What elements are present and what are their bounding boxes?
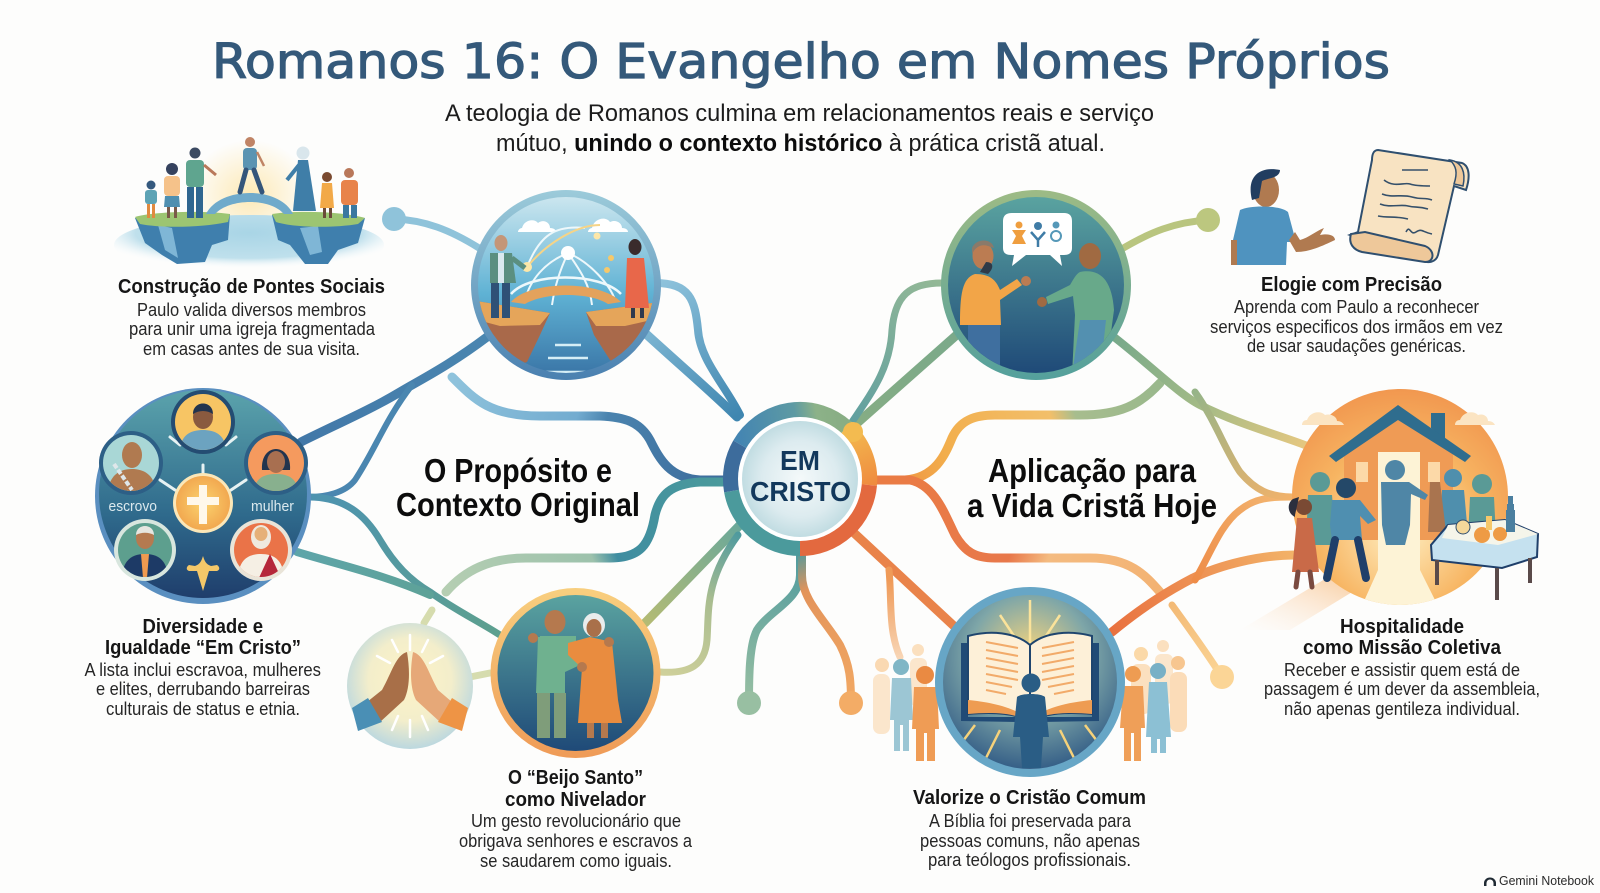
- heading: O Propósito e Contexto Original: Contexto Original: [396, 486, 640, 523]
- text: Diversidade e Igualdade: culturais de status e etnia.: [106, 699, 300, 719]
- heading: Aplicação para a Vida Cristã Hoje: [967, 452, 1217, 524]
- sub: left person with chain: [99, 431, 163, 495]
- text: Hospitalidade como Missão Coletiva: Receber e assistir quem está de: [1284, 660, 1520, 680]
- heading: O Propósito e Contexto Original: [396, 452, 640, 523]
- text: Diversidade e Igualdade: Diversidade e: [142, 615, 263, 638]
- subtitle: mútuo, unindo o contexto histórico à prática cristã atual.: [496, 130, 1105, 157]
- subtitle: A teologia de Romanos culmina em relacionamentos reais e serviço: [445, 100, 1154, 127]
- text: Construção de Pontes Sociais: em casas antes de sua visita.: [143, 339, 360, 359]
- icon: praying hands: [347, 623, 473, 749]
- subtitle: [445, 100, 1154, 157]
- icon: bridge circle: [470, 190, 661, 380]
- text: O Beijo Santo: O “Beijo Santo”: [508, 766, 643, 789]
- sub: right crowd: [1120, 640, 1187, 761]
- text: Elogie com Precisão: Elogie com Precisão: [1261, 273, 1442, 296]
- icon: house hospitality: [1240, 389, 1538, 630]
- text: Construção de Pontes Sociais: para unir uma igreja fragmentada: [129, 319, 376, 339]
- watermark: Gemini Notebook: Gemini Notebook: [1499, 874, 1595, 888]
- text: Elogie com Precisão: de usar saudações genéricas.: [1247, 336, 1466, 356]
- text: Valorize o Cristão Comum: para teólogos profissionais.: [928, 850, 1131, 870]
- text: Elogie com Precisão: serviços especificos dos irmãos em vez: [1210, 317, 1503, 337]
- sub: right person: [244, 431, 308, 495]
- icon: man pointing to scroll: [1231, 150, 1469, 265]
- text: Diversidade e Igualdade: Igualdade “Em Cristo”: [105, 636, 301, 659]
- sub: guests: [1289, 460, 1496, 587]
- icon: open book with people: [873, 587, 1187, 777]
- text: O Beijo Santo: Um gesto revolucionário que: [471, 811, 681, 831]
- text: Valorize o Cristão Comum: A Bíblia foi preservada para: [929, 811, 1132, 831]
- sub: center cross medallion: [173, 473, 233, 533]
- text: Diversidade e Igualdade: e elites, derrubando barreiras: [96, 679, 310, 699]
- text: Hospitalidade como Missão Coletiva: Hospitalidade: [1340, 615, 1464, 638]
- icon: diversity circle: [95, 388, 311, 604]
- label: escrovo: escrovo: [108, 498, 157, 515]
- sub: left crowd: [873, 644, 939, 761]
- heading: Aplicação para a Vida Cristã Hoje: Aplicação para: [988, 452, 1197, 489]
- central hub: Em Cristo: CRISTO: [750, 476, 851, 507]
- sub: small ornament: [187, 556, 219, 591]
- text: O Beijo Santo: [459, 766, 693, 871]
- text: O Beijo Santo: como Nivelador: [505, 788, 646, 811]
- heading: Aplicação para a Vida Cristã Hoje: a Vida Cristã Hoje: [967, 487, 1217, 524]
- sub: robed man: [230, 519, 292, 581]
- text: O Beijo Santo: obrigava senhores e escravos a: [459, 831, 693, 851]
- text: O Beijo Santo: se saudarem como iguais.: [480, 851, 672, 871]
- sub: man: [1231, 169, 1335, 265]
- title: Romanos 16: O Evangelho em Nomes Próprios: [212, 34, 1390, 90]
- text: Diversidade e Igualdade: A lista inclui escravoa, mulheres: [84, 660, 321, 680]
- text: Hospitalidade como Missão Coletiva: passagem é um dever da assembleia,: [1264, 679, 1540, 699]
- sub: top person: [171, 390, 235, 454]
- label: mulher: mulher: [251, 498, 294, 515]
- central hub: Em Cristo: EM: [780, 445, 820, 476]
- connector network: [297, 207, 1310, 715]
- central hub: Em Cristo: [731, 410, 869, 548]
- sub: suited man: [114, 519, 176, 581]
- text: Hospitalidade como Missão Coletiva: como Missão Coletiva: [1303, 636, 1502, 659]
- icon: holy kiss embrace: [490, 588, 660, 758]
- text: Valorize o Cristão Comum: [913, 786, 1146, 870]
- text: Elogie com Precisão: Aprenda com Paulo a reconhecer: [1234, 297, 1479, 317]
- sub: table: [1431, 496, 1538, 600]
- text: Diversidade e Igualdade: [84, 615, 321, 719]
- icon: conversation circle: [941, 190, 1131, 380]
- text: Construção de Pontes Sociais: [118, 275, 385, 359]
- icon: people on islands with a bridge: [114, 137, 384, 275]
- heading: O Propósito e Contexto Original: O Propósito e: [424, 452, 612, 489]
- text: Hospitalidade como Missão Coletiva: [1264, 615, 1540, 719]
- text: Valorize o Cristão Comum: Valorize o Cristão Comum: [913, 786, 1146, 809]
- sub: scroll: [1350, 150, 1469, 262]
- text: Construção de Pontes Sociais: Construção de Pontes Sociais: [118, 275, 385, 298]
- text: Hospitalidade como Missão Coletiva: não apenas gentileza individual.: [1284, 699, 1520, 719]
- text: Elogie com Precisão: [1210, 273, 1503, 356]
- text: Construção de Pontes Sociais: Paulo valida diversos membros: [137, 300, 366, 320]
- text: Valorize o Cristão Comum: pessoas comuns, não apenas: [920, 831, 1140, 851]
